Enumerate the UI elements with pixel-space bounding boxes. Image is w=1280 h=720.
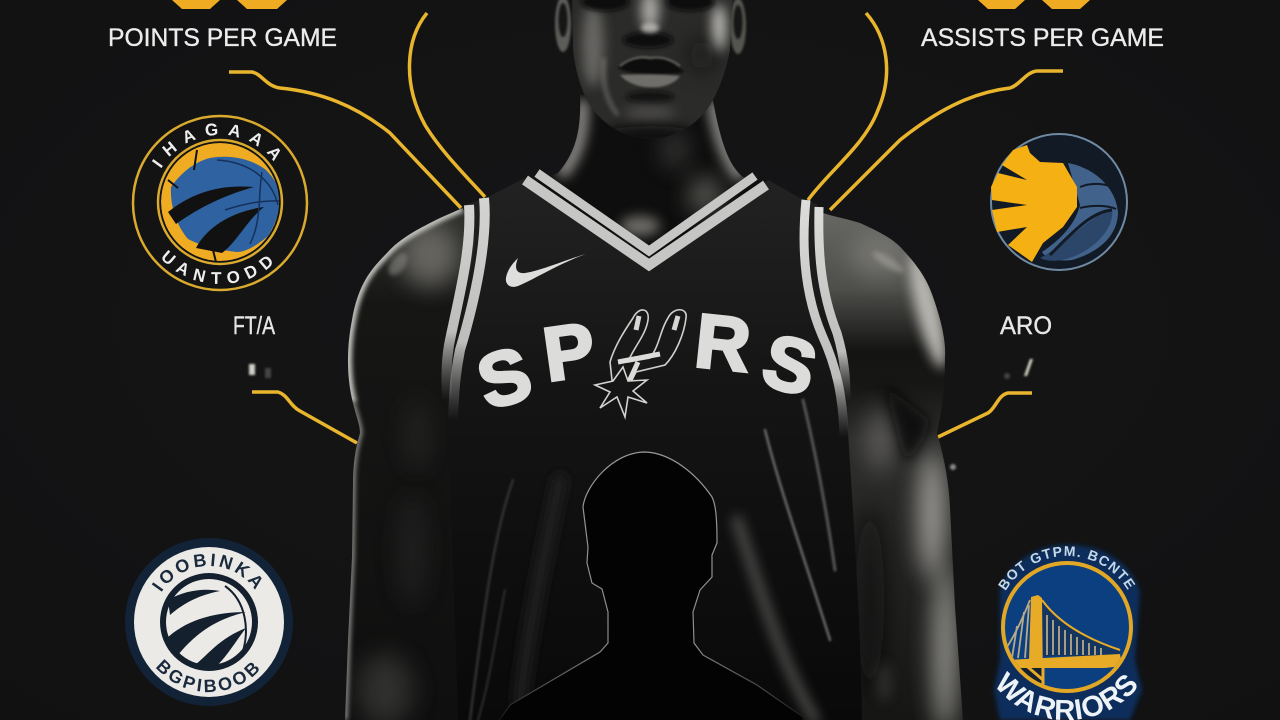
spur icon [595,310,686,417]
ears [555,0,746,54]
logo: raptors white badge [125,538,293,706]
label: assists per game: ASSISTS PER GAME [921,24,1164,52]
connector: assists per game to shoulder [830,71,1063,210]
stat hexagons: assists per game [978,0,1090,9]
logo: raptors gold ring: UANTODD [162,250,272,284]
player figure [340,0,970,720]
label: ARO: ARO [1000,312,1052,340]
right arm stripes [804,200,846,437]
nike swoosh [506,254,586,287]
connector: ARO to arm [938,393,1032,437]
ball [161,143,280,262]
connector lines [229,13,1063,443]
letter P: P [538,307,600,398]
letter S: S [754,318,825,413]
ring lettering: IHAGAAA [152,124,280,168]
connector: FT/A to arm [252,392,357,443]
stat hexagons: points per game [172,0,287,9]
ball claw marks [165,586,246,670]
logo: raptors gold ring [132,114,308,292]
logo: pacers style yellow and blue [991,134,1127,270]
collar bands [525,173,766,265]
connector: left top curve [409,13,485,197]
face [572,0,732,138]
letter R: R [691,298,755,389]
neck [538,95,746,258]
connector: right top curve [808,13,887,200]
left arm stripes [446,198,485,420]
logo: warriors [992,542,1144,720]
small marks under ARO [950,359,1033,470]
connector: points per game to shoulder [229,72,461,208]
jersey wordmark: SPURS [468,298,825,426]
letter S: S [468,331,540,426]
label: points per game: POINTS PER GAME [108,24,337,52]
jersey fold highlights [470,400,835,720]
anonymous silhouette [498,452,803,720]
warriors top lettering: BOT GTPM. BCNTE [998,546,1136,590]
left arm [345,208,475,720]
logo: raptors white badge: BGPIBOOB [156,659,259,692]
star rowel [595,367,647,417]
jersey body [447,178,862,720]
bridge [1008,595,1121,685]
claw mark [991,145,1077,262]
right arm [823,213,963,720]
small marks under FT/A [249,364,271,378]
label: FT/A: FT/A [233,312,275,340]
badge lettering: IOOBINKA [152,554,262,592]
